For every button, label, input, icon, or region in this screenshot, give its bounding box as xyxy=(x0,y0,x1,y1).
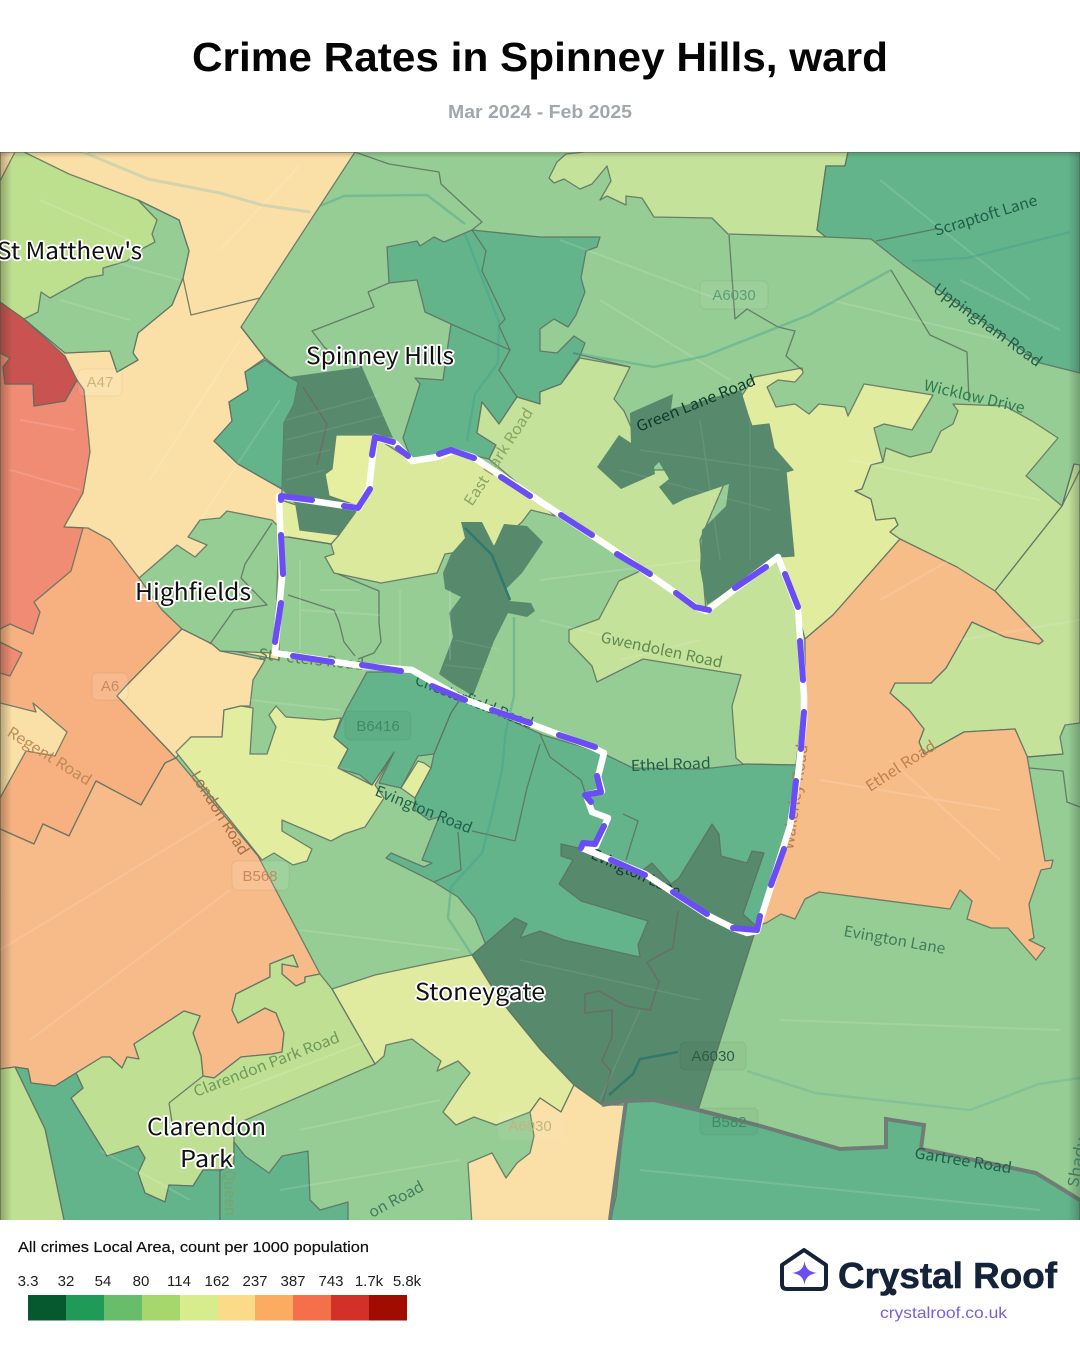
road labels: Chesterfield Road xyxy=(412,669,536,733)
legend scale labels: 114 xyxy=(167,1273,191,1290)
region: ward south-west mid green xyxy=(334,672,461,788)
region: far east yellow green xyxy=(890,464,1080,757)
road shields: B568 xyxy=(242,868,278,885)
road labels: Ethel Road xyxy=(861,735,940,796)
region: NE Green Lane dark xyxy=(597,390,794,605)
place labels: Park xyxy=(180,1140,233,1174)
region: north-west tan xyxy=(0,152,355,660)
region: salmon south xyxy=(0,642,22,676)
logo: Crystal Roof xyxy=(782,1250,1058,1296)
region: east yellow green xyxy=(855,404,1062,591)
road labels: London Road xyxy=(186,767,254,859)
place labels: Highfields xyxy=(135,573,251,607)
road labels: Wakerley Road xyxy=(777,743,813,851)
road labels: Uppingham Road xyxy=(929,278,1047,371)
road shields: A6030 xyxy=(508,1118,552,1135)
region: east peach xyxy=(760,539,1053,960)
pale streams xyxy=(747,1071,1080,1110)
legend scale labels: 237 xyxy=(242,1273,268,1290)
legend scale labels: 387 xyxy=(280,1273,306,1290)
icon: house with star xyxy=(782,1250,826,1289)
region: south dark xyxy=(472,824,764,1110)
region: ward park pale xyxy=(325,437,555,583)
internal boundaries xyxy=(169,152,1080,1122)
road labels xyxy=(3,189,1080,1222)
region: north-east mid green xyxy=(817,152,1080,373)
road shields: B582 xyxy=(711,1114,747,1131)
road shields xyxy=(78,281,768,1140)
legend scale labels: 743 xyxy=(318,1273,344,1290)
road labels: Wicklow Drive xyxy=(922,374,1027,418)
region: ward centre dark xyxy=(439,522,543,696)
road labels: St Peters Road xyxy=(257,643,365,675)
road labels: Queen xyxy=(219,1169,242,1216)
road labels: Clarendon Park Road xyxy=(190,1027,342,1102)
choropleth map xyxy=(0,152,1080,1225)
region: red xyxy=(0,302,77,406)
region: Highfields green xyxy=(139,511,279,653)
region: pale strip xyxy=(401,761,431,798)
road labels: Evington Lane xyxy=(588,843,684,902)
legend scale labels: 54 xyxy=(95,1273,111,1290)
edge shading xyxy=(0,152,1080,1220)
region: south-west mid green xyxy=(15,1067,220,1225)
legend colour bar xyxy=(28,1295,407,1320)
road labels: Evington Road xyxy=(372,780,475,838)
region: NW dark xyxy=(282,367,393,535)
place labels: Stoneygate xyxy=(415,973,545,1007)
rivers and canal xyxy=(320,195,1070,955)
road shields: B6416 xyxy=(356,718,400,735)
ward boundary: Spinney Hills xyxy=(275,437,804,933)
region: salmon xyxy=(0,353,90,634)
region: Stoneygate pale xyxy=(332,955,574,1125)
legend scale labels: 3.3 xyxy=(18,1273,38,1290)
road labels: Gwendolen Road xyxy=(599,626,725,673)
legend scale labels: 80 xyxy=(133,1273,149,1290)
darker inner lines xyxy=(303,387,678,1105)
road labels: Green Lane Road xyxy=(633,370,759,437)
region: far south-west xyxy=(0,1067,65,1225)
road labels: Ethel Road xyxy=(630,752,711,776)
boundary white casing xyxy=(275,437,804,933)
road shields: A6030 xyxy=(712,287,756,304)
road labels: Gartree Road xyxy=(913,1142,1013,1178)
region: East Park yellow green xyxy=(477,358,730,611)
road labels: on Road xyxy=(364,1176,427,1222)
region: ward north pale patch xyxy=(325,435,374,506)
region: pale east xyxy=(741,368,933,639)
legend scale labels xyxy=(18,1273,422,1290)
date range subtitle: Mar 2024 - Feb 2025 xyxy=(448,102,632,122)
logo wordmark: Crystal Roof xyxy=(838,1255,1058,1296)
region: north-centre mid green xyxy=(387,230,600,461)
legend scale labels: 5.8k xyxy=(393,1273,422,1290)
legend scale labels: 32 xyxy=(58,1273,74,1290)
streets xyxy=(0,165,1080,1210)
road labels: Scraptoft Lane xyxy=(931,189,1040,241)
street stripes in dark areas xyxy=(286,395,780,1100)
region: pale left strip xyxy=(279,500,339,544)
place labels: Spinney Hills xyxy=(306,337,454,371)
legend title: All crimes Local Area, count per 1000 population xyxy=(18,1239,369,1256)
region: west orange xyxy=(0,527,182,844)
region: north-west yellow green xyxy=(0,152,189,372)
website link: crystalroof.co.uk xyxy=(880,1305,1008,1322)
region: south tan xyxy=(468,1085,626,1225)
legend scale labels: 162 xyxy=(204,1273,230,1290)
place labels: Clarendon xyxy=(147,1108,266,1142)
title: Crime Rates in Spinney Hills, ward xyxy=(192,34,888,80)
place labels xyxy=(0,232,545,1174)
region: Gwendolen yellow green xyxy=(569,557,804,765)
road labels: East Park Road xyxy=(459,404,538,510)
region: north-west light green xyxy=(24,200,189,372)
legend scale labels: 1.7k xyxy=(355,1273,384,1290)
region: top centre yellow green xyxy=(549,152,848,237)
river in dark area xyxy=(465,528,678,1095)
road shields: A6030 xyxy=(691,1048,735,1065)
Gartree boundary xyxy=(602,1100,1080,1220)
road shields: A6 xyxy=(101,678,119,695)
region: south mid green patch xyxy=(220,1142,348,1225)
region: south-west peach xyxy=(0,758,320,1086)
region: Regent Road tan xyxy=(0,703,67,798)
region: north-west mid green xyxy=(214,360,298,489)
region: south mid green xyxy=(386,698,796,960)
region: south-east mid green xyxy=(609,1100,1080,1225)
boundary purple dashes xyxy=(275,437,804,930)
region: tan patch xyxy=(117,629,265,758)
place labels: St Matthew's xyxy=(0,232,142,266)
region: Clarendon yellow green xyxy=(71,955,375,1202)
region: pale west xyxy=(176,706,393,865)
road shields: A47 xyxy=(87,374,113,391)
road labels: Evington Lane xyxy=(842,920,947,959)
road labels: Regent Road xyxy=(3,721,96,790)
